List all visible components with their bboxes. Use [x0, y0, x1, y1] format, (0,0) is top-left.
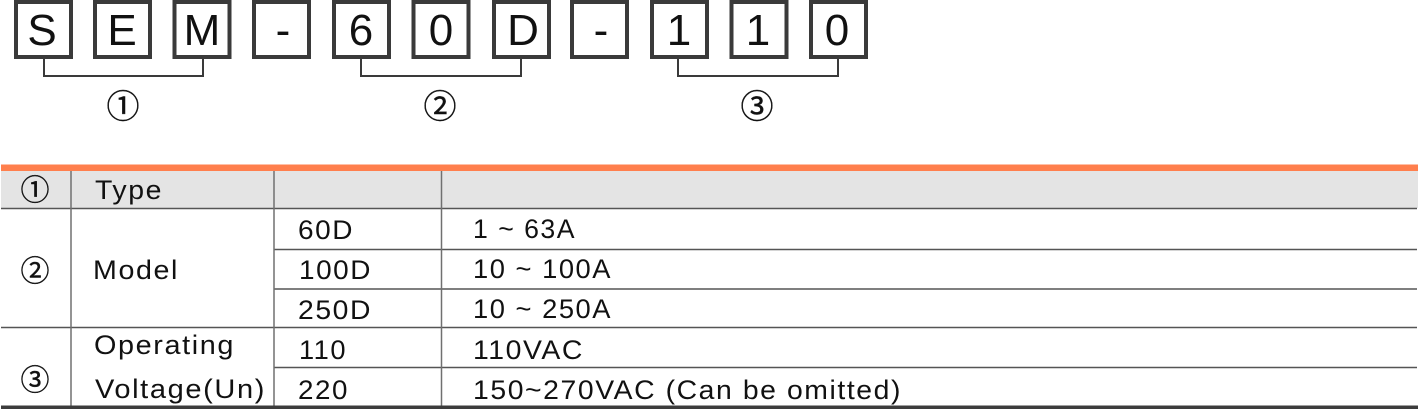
code box: S: S	[27, 6, 57, 55]
table header background	[1, 170, 1418, 208]
code box: 0	[414, 2, 468, 57]
model 250D: 250D	[298, 295, 372, 325]
row group: model: ②	[20, 248, 50, 290]
model 60D: 60D	[298, 215, 354, 245]
voltage 110: 110VAC	[473, 335, 584, 365]
model 250D: 10 ~ 250A	[473, 294, 612, 324]
code box: 1: 1	[746, 6, 770, 55]
code box: 0	[811, 2, 866, 57]
code box: 6	[334, 2, 389, 57]
code box: D: D	[507, 6, 539, 55]
row group: model: Model	[93, 255, 179, 285]
code box: S	[16, 2, 71, 57]
bottom rule	[1, 406, 1418, 409]
code box: E: E	[107, 6, 137, 55]
model code diagram	[16, 2, 866, 128]
model 60D: 1 ~ 63A	[473, 214, 576, 244]
model 60D	[298, 214, 576, 245]
row group: operating voltage: ③	[20, 357, 50, 399]
row: type: Type	[95, 175, 163, 205]
voltage 220	[298, 375, 902, 405]
code box: 6: 6	[349, 6, 373, 55]
row group: model	[20, 214, 612, 325]
voltage 110: 110	[299, 335, 347, 365]
specification table	[1, 164, 1418, 409]
code box: dash	[572, 2, 627, 57]
row group: operating voltage: Operating	[94, 330, 235, 360]
bracket 1	[44, 59, 203, 76]
code box: M: M	[184, 6, 220, 55]
model 100D: 10 ~ 100A	[473, 254, 612, 284]
row group: operating voltage	[20, 330, 902, 405]
code box: dash: -	[276, 6, 290, 55]
marker 3: ③	[740, 80, 774, 128]
code box: dash	[254, 2, 309, 57]
code box: E	[95, 2, 150, 57]
bracket 3	[678, 59, 838, 76]
voltage 220: 150~270VAC (Can be omitted)	[473, 375, 902, 405]
voltage 220: 220	[298, 375, 349, 405]
code box: dash: -	[594, 6, 608, 55]
code box: 1: 1	[667, 6, 691, 55]
code box: 1	[652, 2, 707, 57]
model 250D	[298, 294, 612, 325]
code box: M	[174, 2, 230, 57]
voltage 110	[299, 335, 584, 365]
row: type: ①	[20, 167, 50, 209]
bracket 2	[361, 59, 521, 76]
code box: 1	[732, 2, 786, 57]
model 100D: 100D	[299, 255, 372, 285]
marker 1: ①	[106, 80, 140, 128]
marker 2: ②	[424, 80, 456, 128]
code box: 0: 0	[429, 6, 453, 55]
row group: operating voltage: Voltage(Un)	[95, 374, 266, 404]
model 100D	[299, 254, 612, 285]
orange top rule	[1, 164, 1418, 171]
code box: 0: 0	[825, 6, 849, 55]
row: type	[20, 167, 163, 209]
code box: D	[494, 2, 549, 57]
